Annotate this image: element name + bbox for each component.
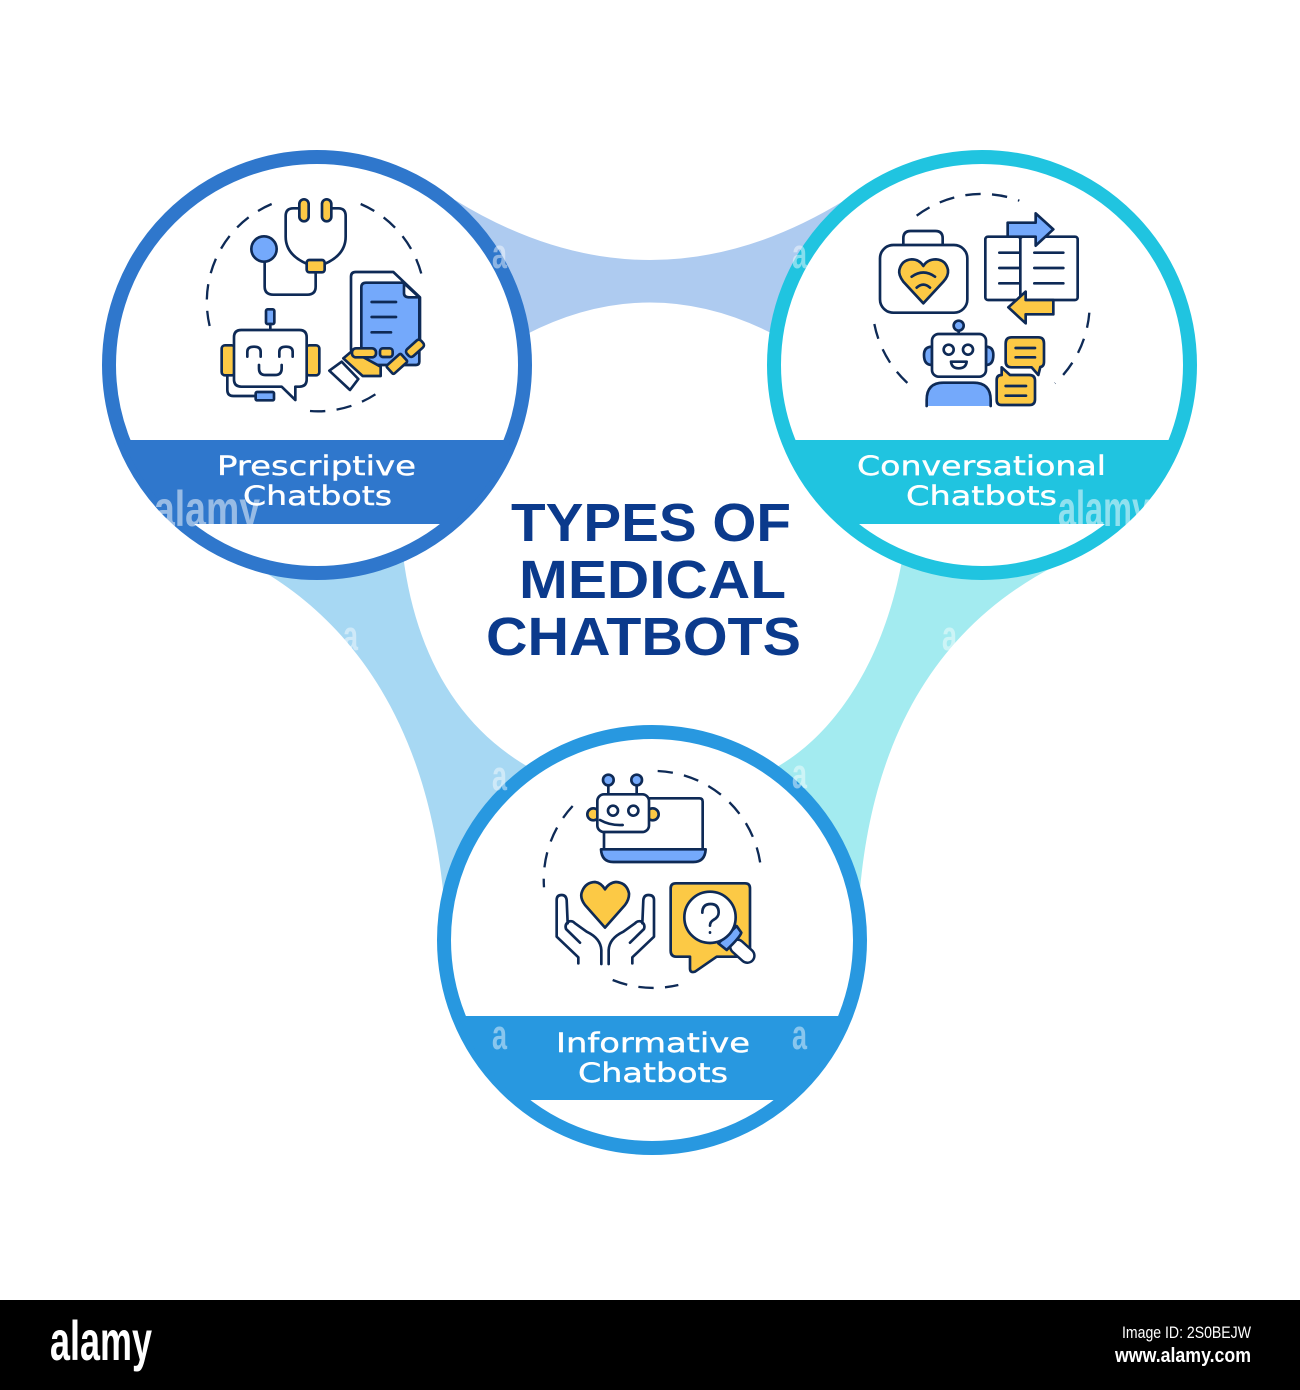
icon: conversational chatbot	[874, 194, 1089, 406]
website: www.alamy.com	[1114, 1345, 1251, 1367]
image id: Image ID: 2S0BEJW	[1122, 1323, 1251, 1342]
footer logo: alamy	[50, 1309, 152, 1372]
label band: informative	[466, 1016, 838, 1100]
watermark marks: a	[792, 750, 807, 797]
footer bar	[0, 1300, 1300, 1390]
title: CHATBOTS	[486, 607, 801, 667]
label: conversational chatbots	[857, 451, 1106, 512]
watermark marks: alamy	[1058, 481, 1150, 537]
connector: right band	[775, 555, 1055, 890]
watermark marks: a	[343, 612, 358, 659]
panel: informative chatbots	[437, 732, 867, 1148]
label: informative chatbots: Informative	[556, 1028, 750, 1059]
label band: prescriptive	[130, 440, 504, 524]
panel: conversational chatbots	[765, 157, 1195, 573]
watermark marks: a	[942, 612, 957, 659]
label band: conversational	[796, 440, 1168, 524]
label: prescriptive chatbots	[217, 451, 416, 512]
icon: informative chatbot	[544, 771, 761, 988]
title: MEDICAL	[519, 550, 786, 610]
watermark marks: a	[492, 752, 507, 799]
connector: left band	[250, 555, 530, 890]
watermark marks: a	[492, 1011, 507, 1058]
label: conversational chatbots: Chatbots	[906, 481, 1057, 512]
panel: prescriptive chatbots	[100, 157, 530, 573]
watermark marks: a	[492, 230, 507, 277]
label: informative chatbots	[556, 1028, 750, 1089]
watermark marks: alamy	[154, 481, 260, 537]
watermark marks: a	[792, 1011, 807, 1058]
label: conversational chatbots: Conversational	[857, 451, 1106, 482]
watermark marks: a	[792, 230, 807, 277]
icon: prescriptive chatbot	[207, 199, 425, 411]
title: TYPES OF	[511, 493, 791, 553]
label: informative chatbots: Chatbots	[578, 1058, 728, 1089]
title	[486, 493, 801, 667]
connector: top band	[455, 200, 845, 335]
label: prescriptive chatbots: Chatbots	[243, 481, 392, 512]
watermark marks	[154, 230, 1150, 1058]
label: prescriptive chatbots: Prescriptive	[217, 451, 416, 482]
